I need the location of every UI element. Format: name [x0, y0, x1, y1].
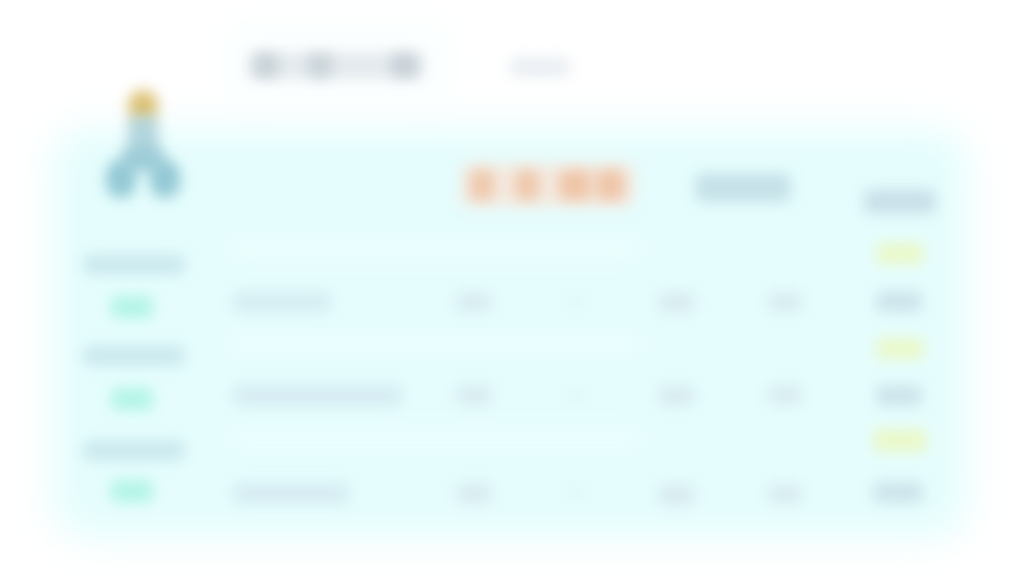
title glow: [232, 26, 448, 102]
heading: blue column header: [695, 173, 791, 202]
heading: right column header: [864, 189, 936, 214]
subtitle: [510, 57, 570, 77]
panel: table background: [52, 128, 968, 538]
